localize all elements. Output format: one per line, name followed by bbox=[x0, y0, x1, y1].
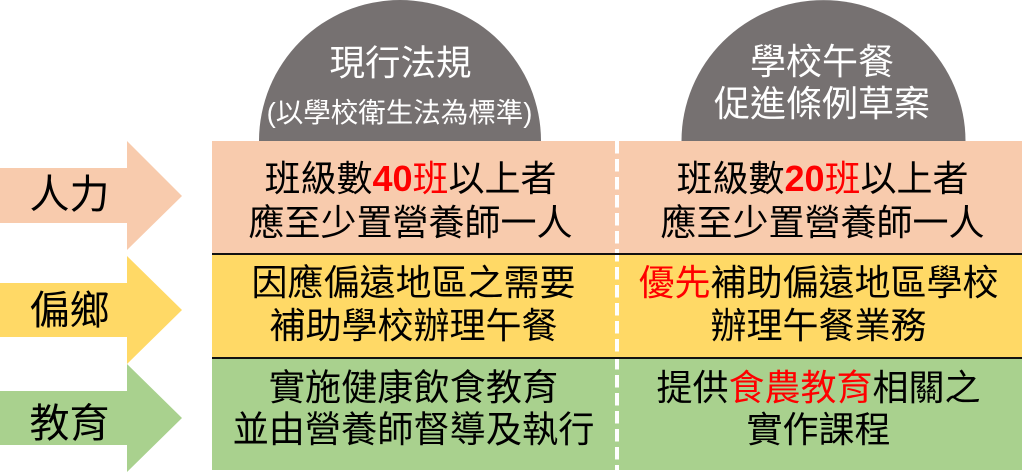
band: education row bbox=[212, 359, 1022, 470]
cell: remote draft bbox=[638, 262, 999, 346]
arrow: education bbox=[0, 364, 182, 472]
cell: manpower current bbox=[248, 158, 572, 243]
arrow: manpower bbox=[0, 141, 182, 250]
cell: education draft: 實作課程 bbox=[746, 409, 890, 450]
band: remote areas row bbox=[212, 255, 1022, 357]
label: education: 教育 bbox=[30, 402, 110, 446]
semicircle header: current regulations bbox=[259, 0, 541, 141]
heading: school lunch draft bbox=[714, 41, 930, 124]
heading: school lunch draft: 促進條例草案 bbox=[714, 83, 930, 124]
cell: remote draft: 辦理午餐業務 bbox=[710, 305, 926, 346]
band: manpower row bbox=[212, 141, 1022, 253]
cell: manpower current: 班級數40班以上者 bbox=[264, 158, 557, 199]
cell: education draft bbox=[656, 367, 981, 450]
cell: manpower draft bbox=[660, 158, 984, 243]
heading: school lunch draft: 學校午餐 bbox=[750, 41, 894, 82]
cell: manpower current: 應至少置營養師一人 bbox=[248, 202, 572, 243]
cell: education current bbox=[233, 367, 594, 450]
heading: current regulations: 現行法規 bbox=[329, 43, 472, 83]
cell: remote current: 補助學校辦理午餐 bbox=[269, 305, 558, 346]
cell: education current: 並由營養師督導及執行 bbox=[233, 409, 594, 450]
cell: manpower draft: 應至少置營養師一人 bbox=[660, 202, 984, 243]
label: manpower: 人力 bbox=[30, 173, 110, 217]
semicircle header: draft act bbox=[682, 0, 966, 141]
cell: remote current bbox=[251, 262, 576, 346]
cell: manpower draft: 班級數20班以上者 bbox=[676, 158, 969, 199]
cell: education draft: 提供食農教育相關之 bbox=[656, 367, 981, 408]
row separators bbox=[212, 253, 1022, 255]
cell: education current: 實施健康飲食教育 bbox=[269, 367, 558, 408]
cell: remote current: 因應偏遠地區之需要 bbox=[251, 262, 576, 303]
subheading: school health act: (以學校衛生法為標準) bbox=[267, 97, 532, 128]
cell: remote draft: 優先補助偏遠地區學校 bbox=[638, 262, 999, 303]
label: remote areas: 偏鄉 bbox=[30, 289, 110, 333]
arrow: remote areas bbox=[0, 256, 182, 364]
column separator bbox=[615, 141, 619, 470]
